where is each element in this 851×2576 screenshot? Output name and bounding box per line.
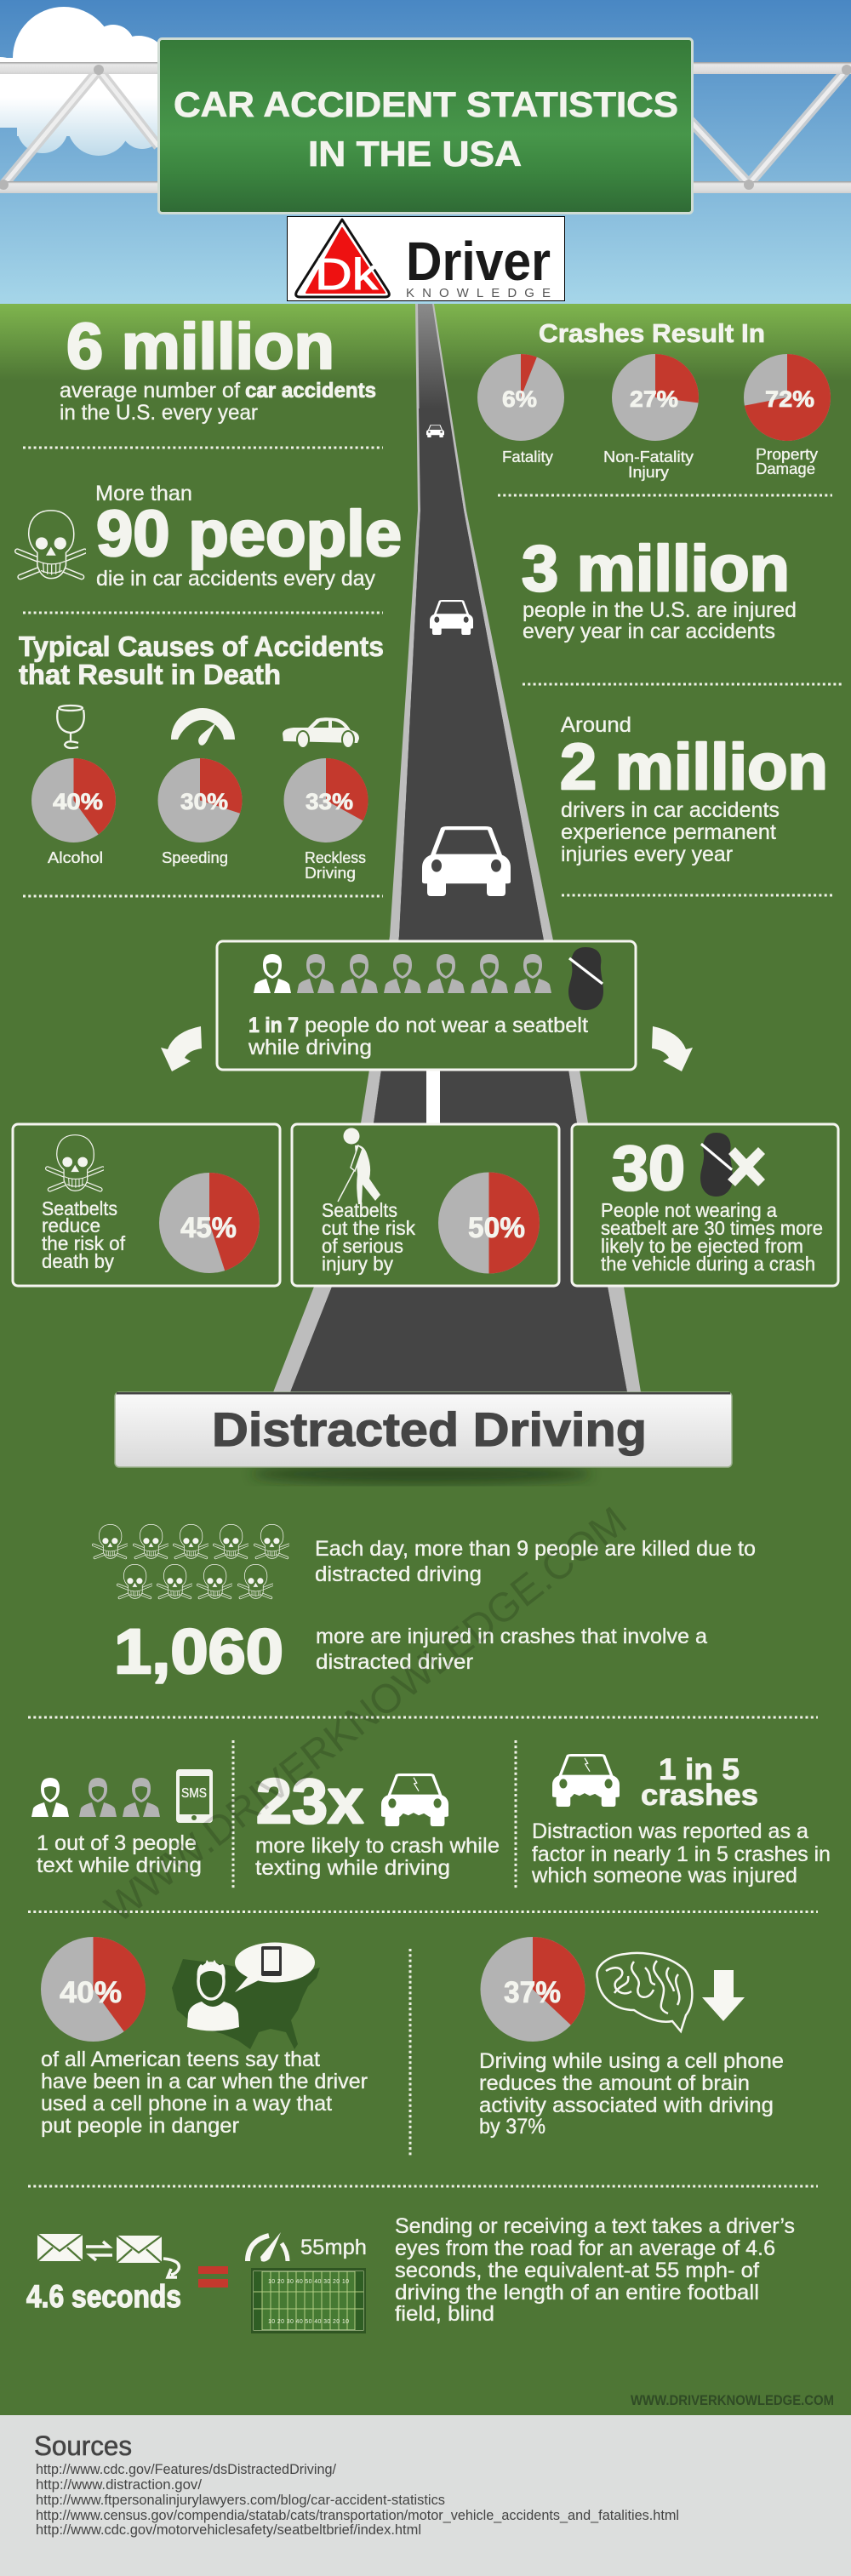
text: text while driving [37, 1853, 202, 1877]
text: seconds, the equivalent-at 55 mph- of [395, 2259, 759, 2282]
stat: 90 people [95, 482, 402, 591]
logo: Driver Knowledge: Dk [315, 250, 379, 300]
heading: crashes [641, 1779, 758, 1812]
section sign: distracted driving: Distracted Driving [212, 1402, 647, 1456]
icon: small car [426, 425, 444, 437]
heading: that Result in Death [19, 659, 281, 690]
sign gantry truss [0, 62, 851, 193]
watermark: WWW.DRIVERKNOWLEDGE.COM [97, 1499, 635, 1932]
text: put people in danger [41, 2114, 239, 2138]
pie: 40%: 40% [60, 1976, 122, 2009]
heading [19, 631, 384, 690]
text: the risk of [42, 1232, 126, 1254]
text [395, 2214, 795, 2326]
pie: reckless driving 33%: Reckless [305, 849, 366, 866]
text: reduce [42, 1214, 100, 1237]
stat: 90 people: More than [95, 482, 192, 505]
stat: 1,060: distracted driver [316, 1650, 473, 1674]
stat: 6 million: in the U.S. every year [60, 401, 258, 425]
panel: 23x [255, 1766, 500, 1880]
text [42, 1197, 126, 1272]
text: Distraction was reported as a [532, 1819, 808, 1843]
pie: fatality 6%: Fatality [502, 448, 553, 466]
text [531, 1819, 831, 1888]
text: Sending or receiving a text takes a driver’s [395, 2214, 795, 2238]
panel: 30 times ejected [572, 1124, 838, 1286]
stat: 90 people: die in car accidents every day [96, 567, 375, 591]
pie: speeding 30%: 30% [180, 789, 228, 814]
pie: non-fatality injury 27% [603, 354, 699, 481]
icon: sms phone [176, 1769, 213, 1823]
panel: seatbelts cut injury [292, 1124, 559, 1286]
stat: 1,060 [114, 1616, 707, 1687]
icon: skull [48, 1135, 103, 1191]
source links [36, 2461, 679, 2538]
text: 1 out of 3 people [37, 1831, 197, 1855]
icon: sms phone: SMS [181, 1786, 207, 1801]
pie: 50%: 50% [468, 1212, 525, 1244]
text: people do not wear a seatbelt [305, 1014, 588, 1037]
pie: 40% [41, 1937, 146, 2042]
text: more likely to crash while [255, 1834, 500, 1858]
text [255, 1834, 500, 1880]
title: CAR ACCIDENT STATISTICS [174, 84, 678, 124]
pie: fatality 6%: 6% [502, 386, 537, 412]
heading: Typical Causes of Accidents [19, 631, 384, 662]
icons: nine skulls [94, 1524, 288, 1598]
pie: 45% [159, 1173, 260, 1273]
pie: speeding 30% [158, 758, 243, 866]
panel: sources [0, 2415, 851, 2576]
text: reduces the amount of brain [479, 2071, 750, 2095]
icon: sports car [283, 717, 359, 748]
text: activity associated with driving [479, 2093, 774, 2117]
icon: football field: 10 20 30 40 50 40 30 20 10 [268, 2279, 349, 2285]
text: while driving [248, 1036, 372, 1060]
sky background [0, 0, 851, 305]
text: death by [42, 1250, 114, 1272]
icon: equals sign [198, 2266, 228, 2288]
text: Driving while using a cell phone [479, 2049, 784, 2073]
text [41, 2048, 368, 2138]
pie: property damage 72% [744, 354, 831, 477]
stat: 6 million: 6 million [66, 311, 334, 383]
stat: 2 million: 2 million [560, 731, 828, 803]
text: 9 people killed: Each day, more than 9 people are killed due to [315, 1537, 756, 1561]
icon: down arrow [702, 1970, 745, 2021]
source links: http://www.census.gov/compendia/statab/cats/transportation/motor_vehicle_accidents_and_fatalities.html [36, 2507, 679, 2523]
text: of all American teens say that [41, 2048, 320, 2071]
source links: http://www.distraction.gov/ [36, 2476, 202, 2493]
title [174, 84, 678, 174]
icon: usa map [172, 1959, 320, 2049]
text [37, 1831, 202, 1877]
logo: Driver Knowledge [288, 216, 565, 301]
icon: brain [597, 1953, 692, 2031]
text: driving the length of an entire football [395, 2281, 759, 2305]
text: Seatbelts [42, 1197, 117, 1219]
stat: 6 million: average number of [60, 379, 240, 403]
stat: 2 million: Around [561, 713, 631, 737]
icon: seatbelt [568, 947, 603, 1010]
stat: 6 million: car accidents [245, 379, 376, 403]
source links: http://www.cdc.gov/motorvehiclesafety/seatbeltbrief/index.html [36, 2522, 421, 2538]
heading: Sources [34, 2430, 132, 2461]
panel: 40% of teens [41, 1937, 368, 2138]
panel: 23x: 23x [256, 1766, 363, 1836]
title sign [158, 39, 693, 213]
pie: 45%: 45% [180, 1212, 237, 1244]
stat: 3 million: every year in car accidents [523, 620, 775, 643]
icon: envelopes [37, 2234, 179, 2277]
stat: 1,060: 1,060 [114, 1616, 283, 1687]
text: Seatbelts [322, 1199, 397, 1221]
pie: alcohol 40%: 40% [53, 789, 103, 814]
road [273, 304, 641, 1392]
text: injury by [322, 1253, 393, 1275]
text [322, 1199, 415, 1275]
label: 4.6 seconds [26, 2279, 181, 2314]
label: 55mph [300, 2236, 367, 2259]
heading: Crashes Result In [539, 318, 765, 348]
text: have been in a car when the driver [41, 2070, 368, 2093]
icon: crashed car [552, 1754, 620, 1807]
stat: 6 million [60, 311, 376, 425]
icon: speedometer [248, 2232, 288, 2262]
text: by 37% [479, 2115, 545, 2139]
icon: seatbelt crossed [700, 1133, 765, 1197]
text [601, 1199, 823, 1275]
text: the vehicle during a crash [601, 1253, 815, 1275]
icon: injured person with cane [338, 1128, 380, 1204]
stat: 3 million: 3 million [522, 533, 790, 605]
icon: crashed car [381, 1773, 448, 1826]
text: likely to be ejected from [601, 1235, 803, 1257]
stat: 2 million: drivers in car accidents [561, 798, 780, 822]
icon: large car [422, 826, 511, 896]
text: eyes from the road for an average of 4.6 [395, 2236, 775, 2260]
panel: seatbelts reduce death [13, 1124, 280, 1286]
pie: property damage 72%: 72% [765, 386, 814, 412]
text [248, 1014, 588, 1060]
text: factor in nearly 1 in 5 crashes in [532, 1842, 831, 1866]
pie: property damage 72%: Property [756, 446, 818, 463]
pie: fatality 6% [477, 354, 564, 466]
stat: 3 million [522, 533, 797, 643]
pie: property damage 72%: Damage [756, 460, 815, 477]
text: field, blind [395, 2302, 494, 2326]
text [479, 2049, 784, 2139]
text: seatbelt are 30 times more [601, 1217, 823, 1239]
pie: 37%: 37% [504, 1976, 561, 2009]
arrow: right [652, 1026, 693, 1071]
panel: 1 in 7 seatbelt [217, 941, 636, 1070]
source links: http://www.ftpersonalinjurylawyers.com/blog/car-accident-statistics [36, 2492, 445, 2508]
text: People not wearing a [601, 1199, 777, 1221]
text: which someone was injured [531, 1864, 797, 1888]
heading [641, 1753, 758, 1812]
cloud [0, 7, 169, 156]
icon: medium car [430, 600, 473, 635]
pie: reckless driving 33%: Driving [305, 865, 356, 882]
icon: football field [251, 2268, 366, 2333]
stat: 1,060: more are injured in crashes that involve a [316, 1625, 707, 1648]
icon: football field: 10 20 30 40 50 40 30 20 10 [268, 2319, 349, 2325]
pie: non-fatality injury 27%: Non-Fatality [603, 448, 694, 466]
icon row: people [254, 954, 551, 993]
panel: 1 in 5 crashes [531, 1753, 831, 1888]
panel: 37% brain activity [479, 1937, 784, 2139]
arrow: left [161, 1026, 202, 1071]
section sign: distracted driving [115, 1392, 732, 1484]
text: cut the risk [322, 1217, 415, 1239]
pie: non-fatality injury 27%: 27% [630, 386, 678, 412]
icon row: people [31, 1778, 160, 1817]
pie: 37% [480, 1937, 585, 2042]
icon: speedometer [171, 708, 235, 745]
text: used a cell phone in a way that [41, 2092, 332, 2116]
text: 9 people killed: distracted driving [315, 1562, 482, 1586]
pie: reckless driving 33% [284, 758, 368, 882]
heading: 1 in 5 [659, 1753, 740, 1786]
icon: skull and crossbones [17, 511, 84, 579]
source links: http://www.cdc.gov/Features/dsDistractedDriving/ [36, 2461, 336, 2477]
pie: reckless driving 33%: 33% [306, 789, 353, 814]
number: 30 [612, 1133, 685, 1203]
title: IN THE USA [308, 134, 522, 174]
pie: speeding 30%: Speeding [162, 849, 228, 866]
pie: non-fatality injury 27%: Injury [628, 464, 669, 481]
text: 9 people killed [315, 1537, 756, 1586]
panel: crashes result in [477, 318, 831, 481]
text: 1 in 7 [248, 1014, 299, 1037]
icon: wine glass [57, 705, 84, 748]
icon: teen with speech bubble [187, 1942, 315, 2031]
logo: Driver Knowledge: KNOWLEDGE [406, 286, 551, 300]
stat: 3 million: people in the U.S. are injured [523, 598, 797, 622]
panel: typical causes [19, 631, 384, 882]
panel: 4.6 seconds [26, 2214, 795, 2333]
text: of serious [322, 1235, 403, 1257]
pie: 50% [438, 1173, 540, 1273]
stat: 90 people: 90 people [96, 498, 402, 570]
pie: alcohol 40%: Alcohol [48, 849, 103, 866]
pie: alcohol 40% [31, 758, 116, 866]
logo: Driver Knowledge: Driver [406, 231, 551, 292]
stat: 2 million: injuries every year [561, 842, 733, 866]
stat: 2 million [560, 713, 828, 866]
text: texting while driving [255, 1856, 450, 1880]
panel: 1 out of 3 text [31, 1769, 213, 1877]
stat: 2 million: experience permanent [561, 820, 776, 844]
